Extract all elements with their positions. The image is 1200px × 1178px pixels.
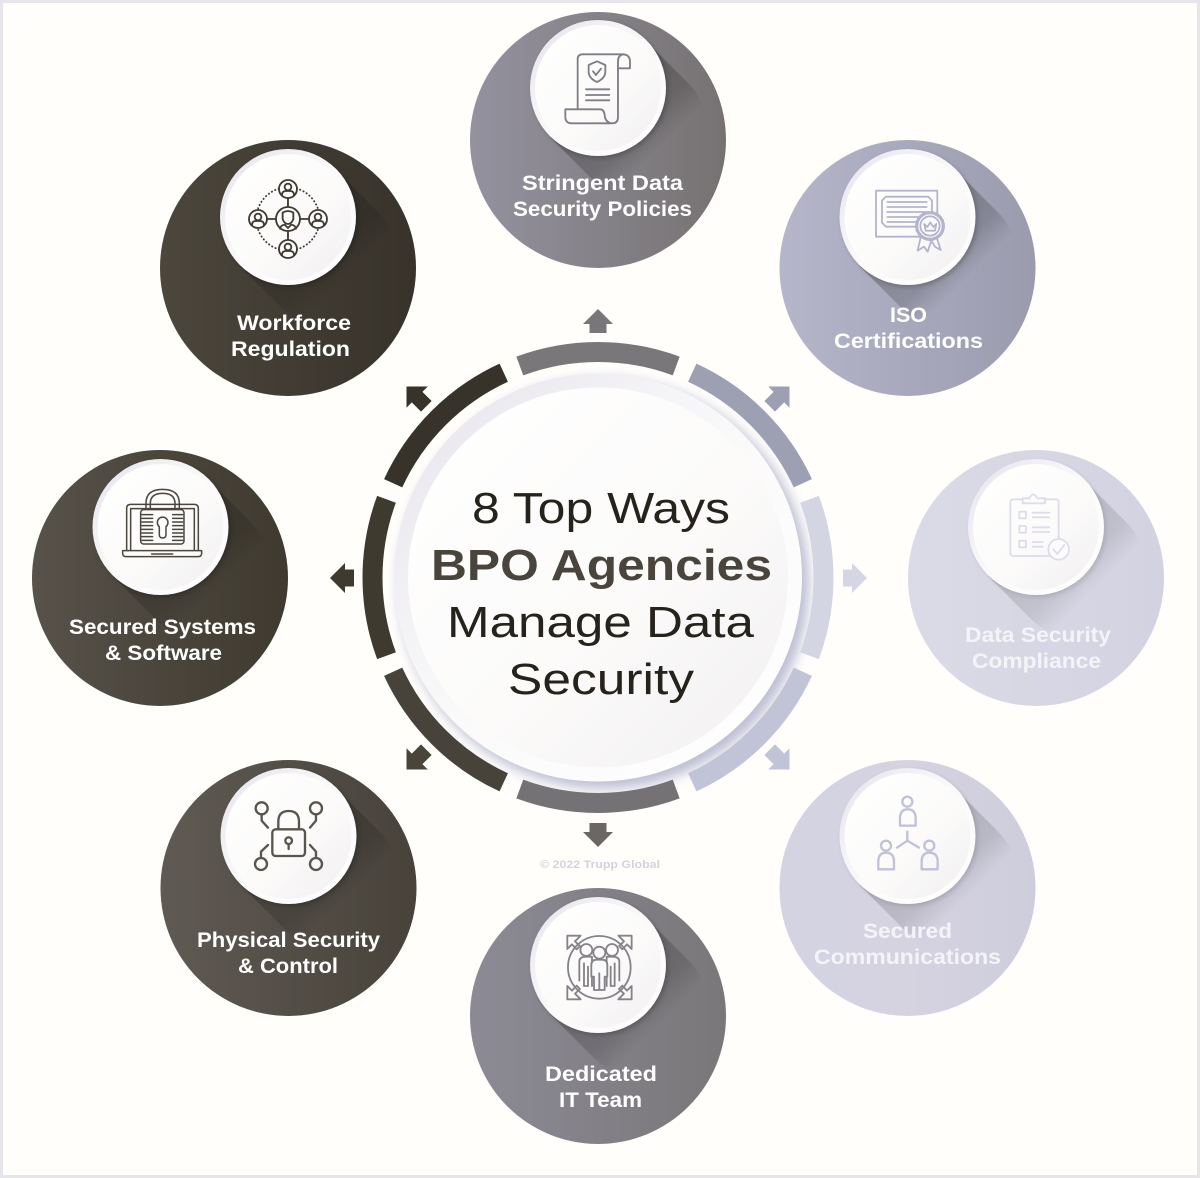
panel: Workforce Regulation xyxy=(160,140,416,396)
panel: ISO Certifications xyxy=(780,140,1036,396)
label: Secured Systems & Software: Secured Systems xyxy=(69,616,256,639)
panel: Stringent Data Security Policies xyxy=(470,12,726,268)
panel: Data Security Compliance xyxy=(908,450,1164,706)
panel: Dedicated IT Team xyxy=(470,888,726,1144)
icon: padlock with circuit nodes xyxy=(255,802,322,870)
title: 8 Top Ways xyxy=(472,484,730,533)
label: Secured Communications xyxy=(814,920,1001,969)
panel: Physical Security & Control xyxy=(160,760,416,1016)
label: Secured Systems & Software xyxy=(69,616,256,665)
label: Stringent Data Security Policies: Security Policies xyxy=(513,198,692,221)
label: Secured Communications: Communications xyxy=(814,946,1001,969)
label: Stringent Data Security Policies xyxy=(513,172,692,221)
central ring and hub xyxy=(373,352,823,803)
label: Physical Security & Control: Physical Security xyxy=(197,929,380,952)
label: ISO Certifications xyxy=(834,304,983,353)
label: Data Security Compliance xyxy=(965,624,1111,673)
label: Workforce Regulation: Workforce xyxy=(237,312,351,335)
arrows xyxy=(330,309,867,847)
copyright: © 2022 Trupp Global xyxy=(540,859,660,871)
title xyxy=(431,484,772,704)
icon: certificate with rosette xyxy=(876,191,943,252)
label: Dedicated IT Team: IT Team xyxy=(559,1089,642,1112)
icon: policy scroll with shield xyxy=(565,54,630,123)
panel: Secured Systems & Software xyxy=(32,450,288,706)
icon: team in expanding circle xyxy=(567,936,632,999)
label: Secured Communications: Secured xyxy=(863,920,952,943)
icon: compliance checklist xyxy=(1010,494,1069,560)
label: Data Security Compliance: Compliance xyxy=(972,650,1101,673)
label: ISO Certifications: Certifications xyxy=(834,330,983,353)
icon: laptop with padlock xyxy=(123,489,202,557)
title: BPO Agencies xyxy=(431,541,772,590)
title: Manage Data xyxy=(447,598,755,647)
icon: connected people xyxy=(878,797,938,869)
label: Workforce Regulation xyxy=(231,312,351,361)
label: Stringent Data Security Policies: Stringent Data xyxy=(522,172,683,195)
label: Dedicated IT Team xyxy=(545,1063,657,1112)
ring segments xyxy=(373,352,823,803)
hub disc xyxy=(394,374,802,782)
title: Security xyxy=(508,655,694,704)
panel: Secured Communications xyxy=(780,760,1036,1016)
icon: workforce network xyxy=(249,180,327,258)
label: Physical Security & Control: & Control xyxy=(238,955,338,978)
label: Dedicated IT Team: Dedicated xyxy=(545,1063,657,1086)
label: Secured Systems & Software: & Software xyxy=(105,642,222,665)
label: Physical Security & Control xyxy=(197,929,380,978)
label: ISO Certifications: ISO xyxy=(890,304,927,327)
label: Data Security Compliance: Data Security xyxy=(965,624,1111,647)
label: Workforce Regulation: Regulation xyxy=(231,338,350,361)
